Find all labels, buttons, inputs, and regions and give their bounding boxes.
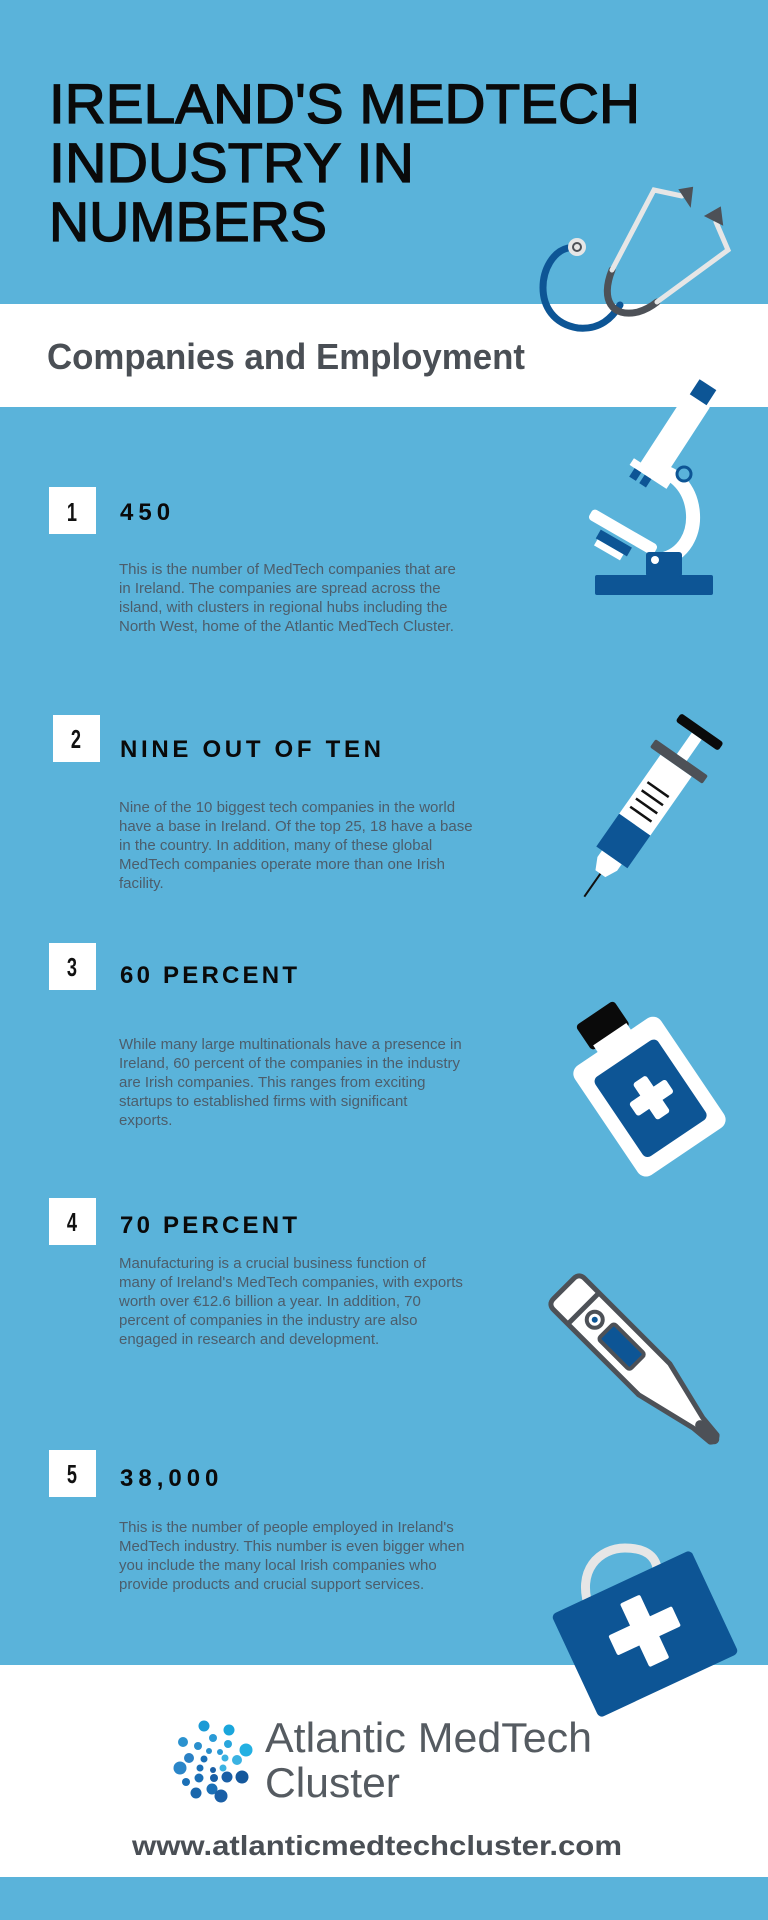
item 2: in the country. In addition, many of these global [119,837,432,854]
icon: thermometer [548,1273,733,1458]
website url: www.atlanticmedtechcluster.com [131,1830,622,1861]
item 4: many of Ireland's MedTech companies, with exports [119,1274,463,1291]
item 4 [49,1198,463,1348]
title: NUMBERS [49,190,327,253]
item 1: 450 [120,499,175,526]
icon: microscope [578,373,726,595]
logo: atlantic medtech cluster [174,1714,592,1806]
item 3: 60 PERCENT [120,962,302,989]
icon: medical kit [551,1548,739,1718]
item 5: 5 [67,1460,77,1489]
icon: stethoscope [543,188,728,328]
item 2 [53,715,473,892]
item 4: percent of companies in the industry are also [119,1312,418,1329]
item 1: 1 [67,498,77,527]
item 5: This is the number of people employed in Ireland's [119,1519,454,1536]
item 1 [49,487,456,635]
item 2: have a base in Ireland. Of the top 25, 18 have a base [119,818,473,835]
section band: companies and employment [0,304,768,407]
item 4: Manufacturing is a crucial business function of [119,1255,427,1272]
icon: medicine bottle [550,985,729,1180]
title [49,72,640,253]
footer panel [0,1665,768,1877]
icon: syringe [558,710,729,915]
item 1: North West, home of the Atlantic MedTech Cluster. [119,618,454,635]
item 3: are Irish companies. This ranges from exciting [119,1074,426,1091]
item 3: Ireland, 60 percent of the companies in the industry [119,1055,461,1072]
section band: companies and employment: Companies and Employment [47,336,525,377]
item 5: provide products and crucial support services. [119,1576,424,1593]
item 3 [49,943,462,1129]
title: INDUSTRY IN [49,131,414,194]
logo: atlantic medtech cluster: Cluster [265,1759,400,1806]
item 5: you include the many local Irish companies who [119,1557,437,1574]
item 3: While many large multinationals have a presence in [119,1036,462,1053]
logo: atlantic medtech cluster: Atlantic MedTech [265,1714,592,1761]
item 5: MedTech industry. This number is even bigger when [119,1538,464,1555]
item 2: MedTech companies operate more than one Irish [119,856,445,873]
item 1: in Ireland. The companies are spread across the [119,580,441,597]
item 1: island, with clusters in regional hubs including the [119,599,448,616]
item 2: facility. [119,875,164,892]
item 4: 4 [67,1208,77,1237]
item 2: Nine of the 10 biggest tech companies in the world [119,799,455,816]
item 5 [49,1450,464,1593]
item 1: This is the number of MedTech companies that are [119,561,456,578]
title: IRELAND'S MEDTECH [49,72,640,135]
item 4: worth over €12.6 billion a year. In addition, 70 [118,1293,421,1310]
item 2: NINE OUT OF TEN [120,736,386,763]
item 2: 2 [71,725,81,754]
item 4: 70 PERCENT [120,1212,302,1239]
item 5: 38,000 [120,1465,223,1492]
item 4: engaged in research and development. [119,1331,379,1348]
item 3: startups to established firms with significant [119,1093,408,1110]
item 3: 3 [67,953,77,982]
item 3: exports. [119,1112,172,1129]
